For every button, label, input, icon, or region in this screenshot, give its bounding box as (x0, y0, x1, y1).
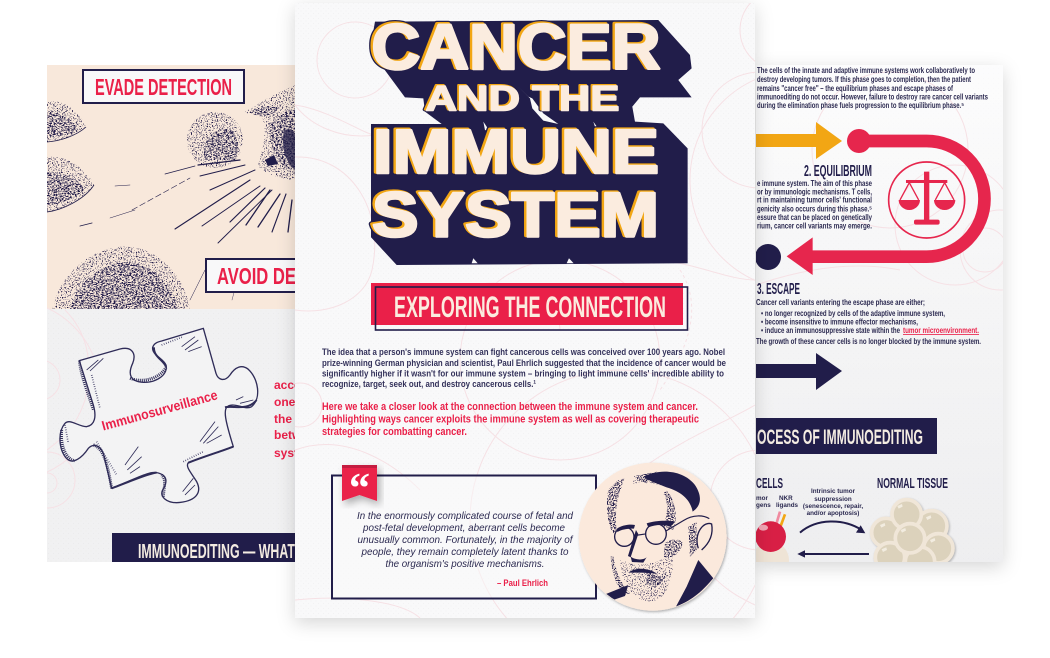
text: equilibrium paragraph: e immune system. The aim of this phase (757, 179, 872, 188)
icon: quotation ribbon: “ (349, 466, 370, 512)
icon: puzzle piece with Immunosurveillance: Immunosurveillance (100, 387, 220, 434)
text: escape paragraph: The growth of these cancer cells is no longer blocked by the immune system. (756, 337, 981, 346)
title: cancer and the immune system: IMMUNE (371, 117, 657, 186)
stippled beard and face contours (620, 474, 677, 602)
heading: 3. escape: 3. ESCAPE (757, 281, 800, 298)
text: clipped red paragraph: between (274, 428, 322, 442)
text: equilibrium paragraph: rt in maintaining tumor cells' functional (757, 196, 872, 205)
panel: right page (756, 65, 1003, 562)
text: equilibrium paragraph: genicity also occurs during this phase.⁵ (757, 204, 872, 213)
title: cancer and the immune system: CANCER (372, 11, 660, 83)
text: intrinsic tumor suppression: suppression (814, 496, 852, 503)
text: quote: post-fetal development, aberrant cells become (362, 523, 565, 534)
text: intrinsic tumor suppression: (senescence, repair, (803, 503, 863, 510)
text: equilibrium paragraph: essure that can be placed on genetically (757, 213, 872, 222)
text: elimination paragraph: during the elimination phase fuels progression to the equilibrium phase.⁵ (757, 101, 964, 110)
label: evade detection (83, 70, 244, 103)
title: cancer and the immune system: AND THE (424, 78, 618, 118)
text: clipped red paragraph: system (274, 446, 315, 460)
title: cancer and the immune system: CANCER (370, 10, 658, 82)
text: escape paragraph: • become insensitive to immune effector mechanisms, (761, 318, 918, 326)
panel: center page (288, 0, 762, 630)
title: cancer and the immune system: CANCER (370, 10, 658, 82)
text: small cell labels: gens (756, 502, 771, 509)
title: cancer and the immune system: AND THE (426, 80, 620, 118)
text: quote: In the enormously complicated course of fetal and (357, 511, 574, 522)
text: intrinsic tumor suppression (803, 488, 863, 517)
panel: left page (47, 65, 295, 562)
title: cancer and the immune system: IMMUNE (371, 117, 657, 186)
icon: red tumor cell (756, 511, 789, 562)
heading: normal tissue: NORMAL TISSUE (877, 475, 948, 492)
title extruded shadow (370, 20, 692, 265)
icons: arrows between cells (797, 522, 869, 558)
banner: exploring the connection (371, 283, 688, 330)
icon: navy dot (755, 244, 781, 270)
text: introduction paragraph: recognize, target, seek out, and destroy cancerous cells.¹ (322, 379, 536, 390)
banner: process of immunoediting: OCESS OF IMMUNOEDITING (757, 426, 923, 449)
text: introduction paragraph: The idea that a person's immune system can fight cancerous cells was conceived over 100 years ago. Nobel (322, 347, 725, 358)
icon: puzzle piece with Immunosurveillance (60, 328, 258, 503)
text: escape paragraph: tumor microenvironment. (903, 326, 979, 335)
text: clipped red paragraph: one of (274, 395, 311, 409)
text: quote: people, they remain completely latent thanks to (361, 547, 569, 558)
title: cancer and the immune system (370, 10, 692, 265)
banner: immunoediting what is it (112, 533, 295, 562)
callout: Paul Ehrlich quote (332, 465, 596, 598)
arrow: red loop with scales icon (787, 129, 984, 275)
heading: cancer cells: CELLS (756, 475, 783, 492)
title: cancer and the immune system: AND THE (424, 78, 618, 118)
text: red highlight paragraph: strategies for combatting cancer. (322, 426, 467, 438)
text: quote: the organism's positive mechanisms. (386, 559, 544, 570)
decorative pink pattern (47, 308, 94, 508)
text: intrinsic tumor suppression: and/or apoptosis) (807, 510, 859, 517)
text: clipped red paragraph: according (274, 378, 331, 392)
icon: normal tissue cells (872, 500, 953, 576)
text: clipped red paragraph: the (274, 412, 292, 426)
title: cancer and the immune system: IMMUNE (373, 118, 659, 187)
title: cancer and the immune system: SYSTEM (372, 180, 659, 250)
icon: scales of justice (899, 172, 955, 225)
icon: Paul Ehrlich portrait (579, 463, 727, 611)
label: avoid destruction: AVOID DES (217, 263, 307, 289)
text: small cell labels: mor (756, 495, 768, 502)
banner: exploring the connection: EXPLORING THE CONNECTION (394, 291, 666, 324)
text: quote (357, 511, 574, 570)
text: elimination paragraph (757, 66, 988, 110)
banner: process of immunoediting (750, 418, 937, 454)
text: clipped red paragraph (274, 382, 295, 460)
label: evade detection: EVADE DETECTION (95, 74, 232, 100)
text: escape paragraph: Cancer cell variants entering the escape phase are either; (756, 298, 925, 307)
text: elimination paragraph: remains "cancer free" – the equilibrium phases and escape phases of (757, 84, 953, 93)
text: introduction paragraph: prize-winning German physician and scientist, Paul Ehrlich suggested that the incidence of cancer would be (322, 358, 726, 369)
text: red highlight paragraph: Here we take a closer look at the connection between the immune system and cancer. (322, 401, 698, 413)
page shadow: right (756, 65, 1003, 562)
banner: immunoediting what is it: IMMUNOEDITING — WHAT IS (138, 541, 310, 563)
arrow: navy (750, 353, 842, 390)
text: elimination paragraph: The cells of the innate and adaptive immune systems work collaboratively to (757, 66, 975, 75)
text: intrinsic tumor suppression: Intrinsic tumor (811, 488, 856, 495)
arrow: yellow (750, 122, 842, 159)
text: escape paragraph (756, 298, 981, 346)
icon: quotation ribbon (342, 465, 377, 512)
decorative pink pattern (756, 72, 1003, 290)
text: small cell labels (756, 495, 799, 509)
decorative illustration: cancer cells on peach background (47, 65, 295, 312)
label: avoid destruction (205, 258, 295, 293)
text: quote: unusually common. Fortunately, in the majority of (358, 535, 574, 546)
title: cancer and the immune system: SYSTEM (370, 180, 657, 250)
text: introduction paragraph (322, 347, 726, 390)
text: escape paragraph: • no longer recognized by cells of the adaptive immune system, (761, 309, 945, 318)
text: red highlight paragraph: Highlighting ways cancer exploits the immune system as well as covering therapeutic (322, 414, 699, 426)
title: cancer and the immune system: SYSTEM (370, 180, 657, 250)
text: red highlight paragraph (322, 401, 699, 438)
text: equilibrium paragraph (757, 179, 872, 231)
text: small cell labels: NKR (779, 495, 793, 502)
decorative pink pattern (295, 3, 755, 618)
text: escape paragraph: • induce an immunosuppressive state within the (761, 326, 900, 335)
text: introduction paragraph: significantly higher if it wasn't for our immune system – bringing to light immune cells' incredible ability to (322, 368, 724, 380)
heading: 2. equilibrium: 2. EQUILIBRIUM (804, 163, 872, 180)
text: small cell labels: ligands (776, 502, 799, 509)
text: equilibrium paragraph: or by immunologic mechanisms. T cells, (757, 187, 872, 196)
text: attribution: – Paul Ehrlich (497, 578, 548, 588)
text: equilibrium paragraph: rium, cancer cell variants may emerge. (757, 222, 872, 231)
text: elimination paragraph: destroy developing tumors. If this phase goes to completion, then the patient (757, 75, 971, 84)
